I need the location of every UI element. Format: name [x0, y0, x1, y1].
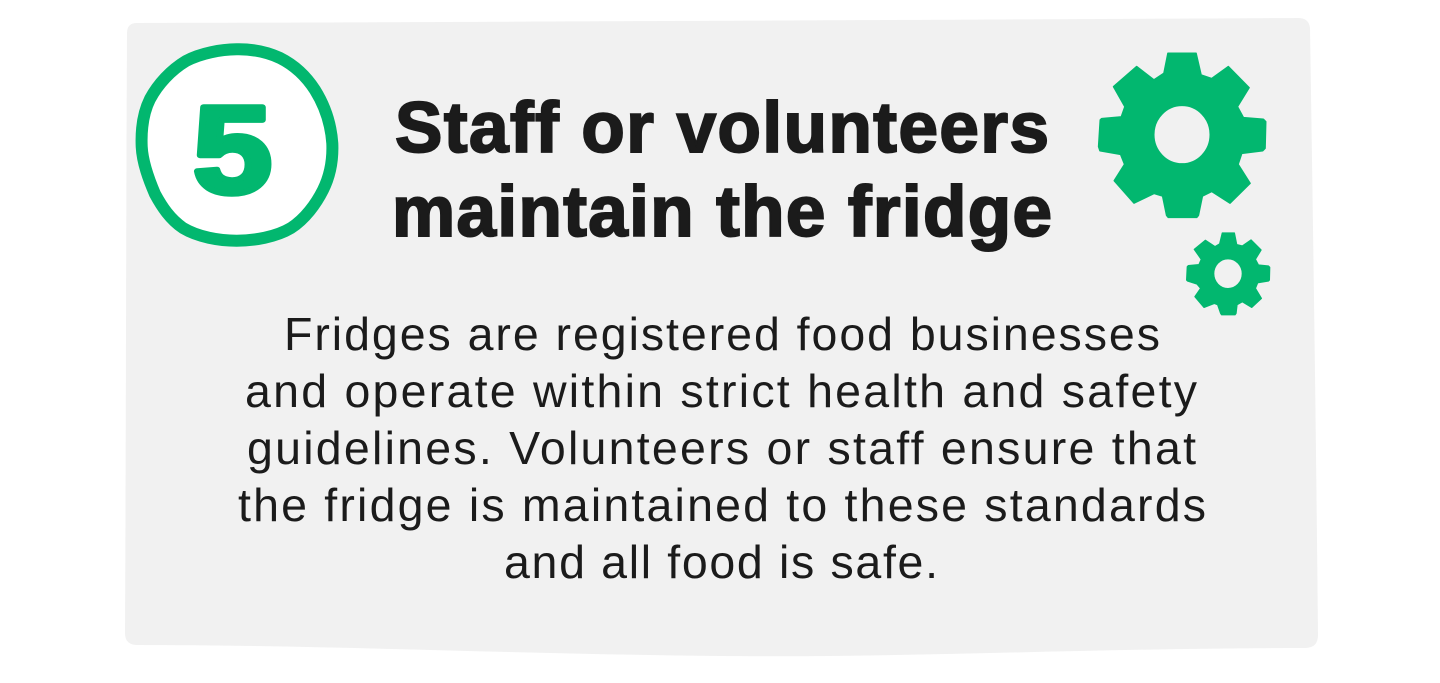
body line 2: and operate within strict health and safety — [245, 365, 1198, 417]
badge ring — [142, 49, 332, 241]
heading — [392, 89, 1052, 252]
body text — [238, 308, 1206, 588]
panel: grey card background — [125, 18, 1318, 656]
body line 4: the fridge is maintained to these standards — [238, 479, 1206, 531]
body line 3: guidelines. Volunteers or staff ensure that — [247, 422, 1196, 474]
heading line 1: Staff or volunteers — [395, 89, 1049, 168]
body line 5: and all food is safe. — [504, 536, 938, 588]
icon: numbered circle badge — [142, 49, 332, 241]
number 5: 5 — [193, 82, 272, 220]
body line 1: Fridges are registered food businesses — [284, 308, 1160, 360]
icon: small gear — [1187, 233, 1270, 315]
icon: large gear — [1099, 53, 1266, 217]
heading line 2: maintain the fridge — [392, 173, 1052, 252]
